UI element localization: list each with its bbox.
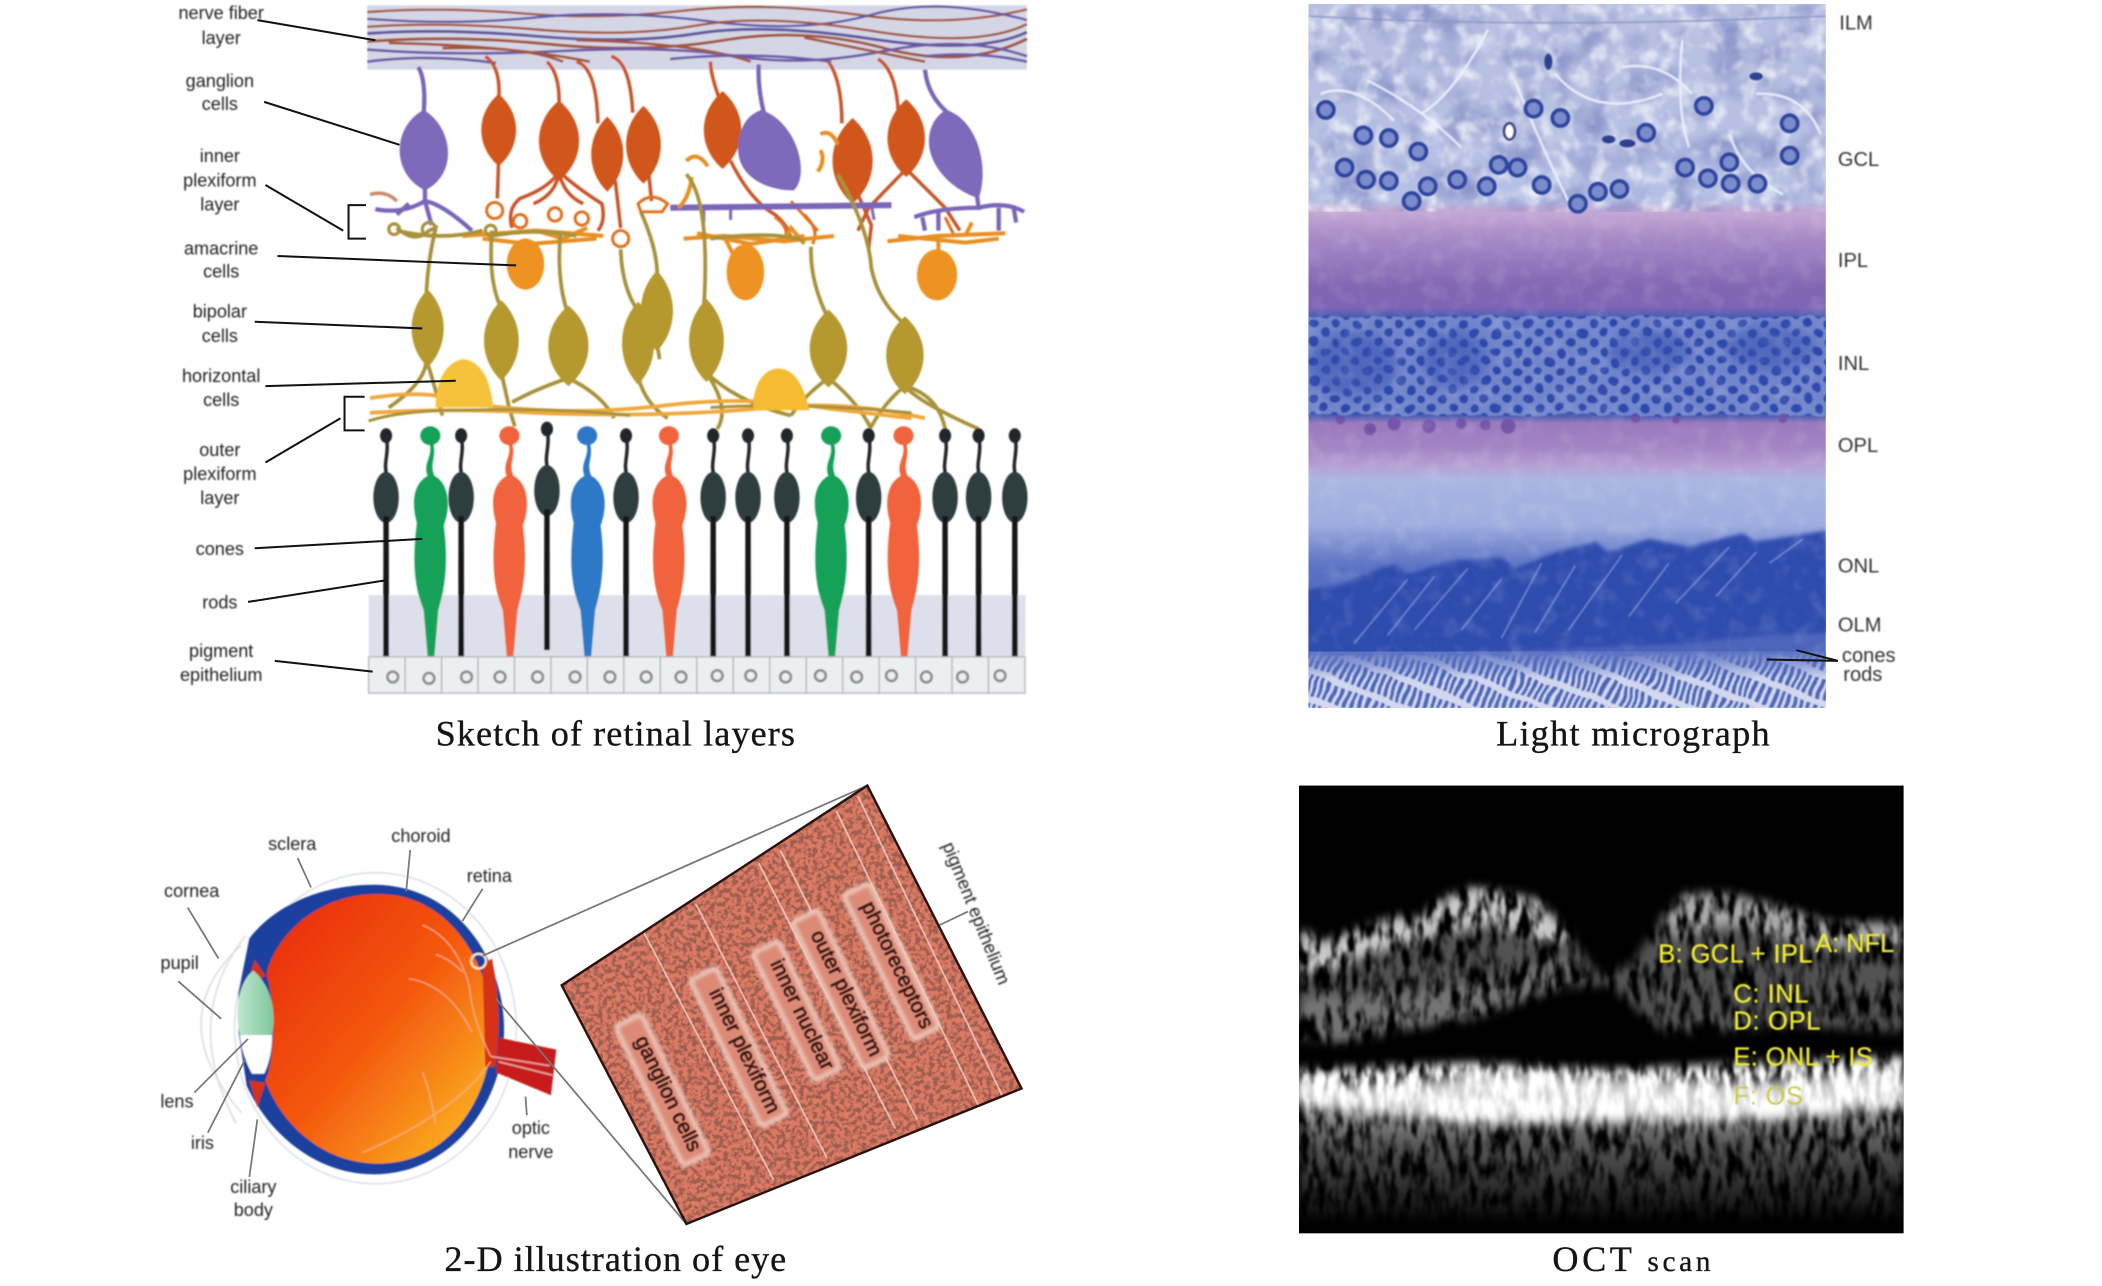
inner nuclear layer cells xyxy=(1300,316,1837,416)
section texture xyxy=(562,786,1022,1224)
pigment epithelium row xyxy=(369,657,1025,693)
section layer labels: ganglion cells xyxy=(630,1032,706,1155)
nerve fiber band xyxy=(367,5,1027,70)
panel: light micrograph xyxy=(1300,4,1896,753)
labels: eye: body xyxy=(234,1200,273,1220)
labels: micrograph layers: GCL xyxy=(1838,149,1879,171)
OCT speckle layers xyxy=(1299,886,1904,1217)
caption: OCT scan: OCT scan xyxy=(1552,1239,1711,1279)
labels: retinal sketch: rods xyxy=(202,593,237,613)
panel: OCT scan xyxy=(1299,786,1904,1279)
OCT layer labels: D: OPL xyxy=(1733,1008,1820,1036)
labels: eye xyxy=(160,826,1014,1220)
labels: eye: pigment epithelium xyxy=(938,839,1014,987)
retina magnifier circle xyxy=(471,954,486,969)
labels: eye: ciliary xyxy=(230,1177,276,1197)
labels: eye: optic xyxy=(512,1118,550,1138)
labels: eye: lens xyxy=(160,1091,194,1111)
labels: retinal sketch: plexiform xyxy=(183,464,257,484)
inner nuclear dark patches xyxy=(1308,327,1815,397)
labels: retinal sketch: cells xyxy=(203,390,239,410)
labels: retinal sketch: layer xyxy=(200,194,239,214)
outer sclera outline xyxy=(201,873,516,1184)
caption: light micrograph: Light micrograph xyxy=(1496,713,1770,753)
ganglion cell nuclei xyxy=(1318,54,1798,212)
ganglion layer mottling xyxy=(1308,4,1826,212)
OCT layer labels: E: ONL + IS xyxy=(1733,1044,1873,1072)
labels: eye: cornea xyxy=(164,881,220,901)
labels: micrograph layers xyxy=(1838,12,1896,686)
leader lines: eye xyxy=(178,850,968,1177)
labels: retinal sketch: cells xyxy=(202,326,238,346)
magnified retina section xyxy=(562,786,1022,1224)
labels: retinal sketch: cells xyxy=(203,261,239,281)
labels: micrograph layers: OLM xyxy=(1838,614,1881,636)
caption: 2-D illustration of eye: 2-D illustration of eye xyxy=(444,1239,786,1279)
labels: retinal sketch: ganglion xyxy=(186,71,254,91)
labels: retinal sketch: pigment xyxy=(189,641,253,661)
OCT layer labels xyxy=(1658,930,1894,1111)
labels: retinal sketch: layer xyxy=(202,28,241,48)
section layer labels: inner nuclear xyxy=(765,956,839,1074)
labels: eye: retina xyxy=(467,866,513,886)
section-wide texture xyxy=(1308,212,1826,661)
section layer labels: photoreceptors xyxy=(857,898,938,1032)
labels: micrograph layers: OPL xyxy=(1838,435,1878,457)
OCT layer labels: B: GCL + IPL xyxy=(1658,941,1812,969)
labels: retinal sketch: cells xyxy=(202,94,238,114)
labels: retinal sketch: epithelium xyxy=(180,665,262,685)
labels: retinal sketch xyxy=(178,3,264,685)
OCT layer labels: F: OS xyxy=(1733,1083,1803,1111)
optic nerve xyxy=(496,1038,556,1095)
OCT layer labels: C: INL xyxy=(1733,981,1808,1009)
labels: micrograph layers: ONL xyxy=(1838,555,1879,577)
labels: retinal sketch: horizontal xyxy=(182,366,260,386)
amacrine cells xyxy=(462,133,1005,300)
outer nuclear dark band xyxy=(1306,531,1829,660)
labels: retinal sketch: amacrine xyxy=(184,239,258,259)
labels: retinal sketch: outer xyxy=(199,440,240,460)
pupil gap xyxy=(240,1035,272,1074)
ganglion cells: orange xyxy=(481,56,960,248)
labels: retinal sketch: bipolar xyxy=(193,302,247,322)
lens xyxy=(238,971,274,1035)
section layer labels: outer plexiform xyxy=(806,926,887,1060)
ganglion layer highlights xyxy=(1308,4,1826,212)
labels: micrograph layers: INL xyxy=(1838,353,1869,375)
cones xyxy=(414,426,921,657)
section label chips xyxy=(615,882,940,1166)
OCT image background xyxy=(1299,786,1904,1233)
eyeball shell xyxy=(239,885,504,1174)
labels: eye: iris xyxy=(191,1133,214,1153)
panel: sketch of retinal layers xyxy=(178,3,1028,753)
labels: retinal sketch: layer xyxy=(200,488,239,508)
eyeball interior xyxy=(265,894,492,1164)
labels: eye: sclera xyxy=(268,834,317,854)
labels: retinal sketch: nerve fiber xyxy=(178,3,264,23)
labels: retinal sketch: cones xyxy=(196,539,244,559)
magnifier lines xyxy=(483,786,867,1224)
bright photoreceptor band glow xyxy=(1299,1066,1904,1123)
retinal vessels xyxy=(362,925,491,1153)
labels: micrograph layers: cones xyxy=(1842,645,1896,667)
horizontal cells xyxy=(369,359,925,421)
caption: sketch of retinal layers: Sketch of retinal layers xyxy=(436,713,795,753)
labels: eye: pupil xyxy=(161,953,199,973)
labels: eye: choroid xyxy=(391,826,451,846)
micrograph image xyxy=(1300,4,1837,710)
rods xyxy=(373,422,1028,657)
ganglion cells: purple xyxy=(370,64,1024,231)
section layer labels xyxy=(630,898,938,1155)
red ciliary edges xyxy=(247,959,499,1107)
outer plexiform nuclei xyxy=(1336,414,1788,435)
leader lines: retinal sketch xyxy=(248,20,516,672)
outer nuclear streaks xyxy=(1354,539,1803,643)
labels: micrograph layers: ILM xyxy=(1839,12,1873,34)
labels: micrograph layers: IPL xyxy=(1838,250,1868,272)
retina sketch artwork xyxy=(367,5,1028,693)
panel: 2-D illustration of eye xyxy=(160,786,1022,1279)
labels: retinal sketch: plexiform xyxy=(183,170,257,190)
white membranes xyxy=(1308,16,1826,201)
OCT layer labels: A: NFL xyxy=(1815,930,1894,958)
labels: micrograph layers: rods xyxy=(1843,664,1882,686)
eye diagram xyxy=(201,873,556,1184)
labels: eye: nerve xyxy=(508,1142,553,1162)
outer segment background xyxy=(369,595,1026,657)
photoreceptor fade xyxy=(1300,652,1837,678)
section layer labels: inner plexiform xyxy=(704,985,785,1117)
photoreceptor stripes xyxy=(1300,654,1837,710)
inner retina layers xyxy=(1299,886,1904,1217)
bipolar cells xyxy=(389,174,979,429)
leader lines: cones and rods xyxy=(1767,650,1838,661)
labels: retinal sketch: inner xyxy=(200,146,240,166)
